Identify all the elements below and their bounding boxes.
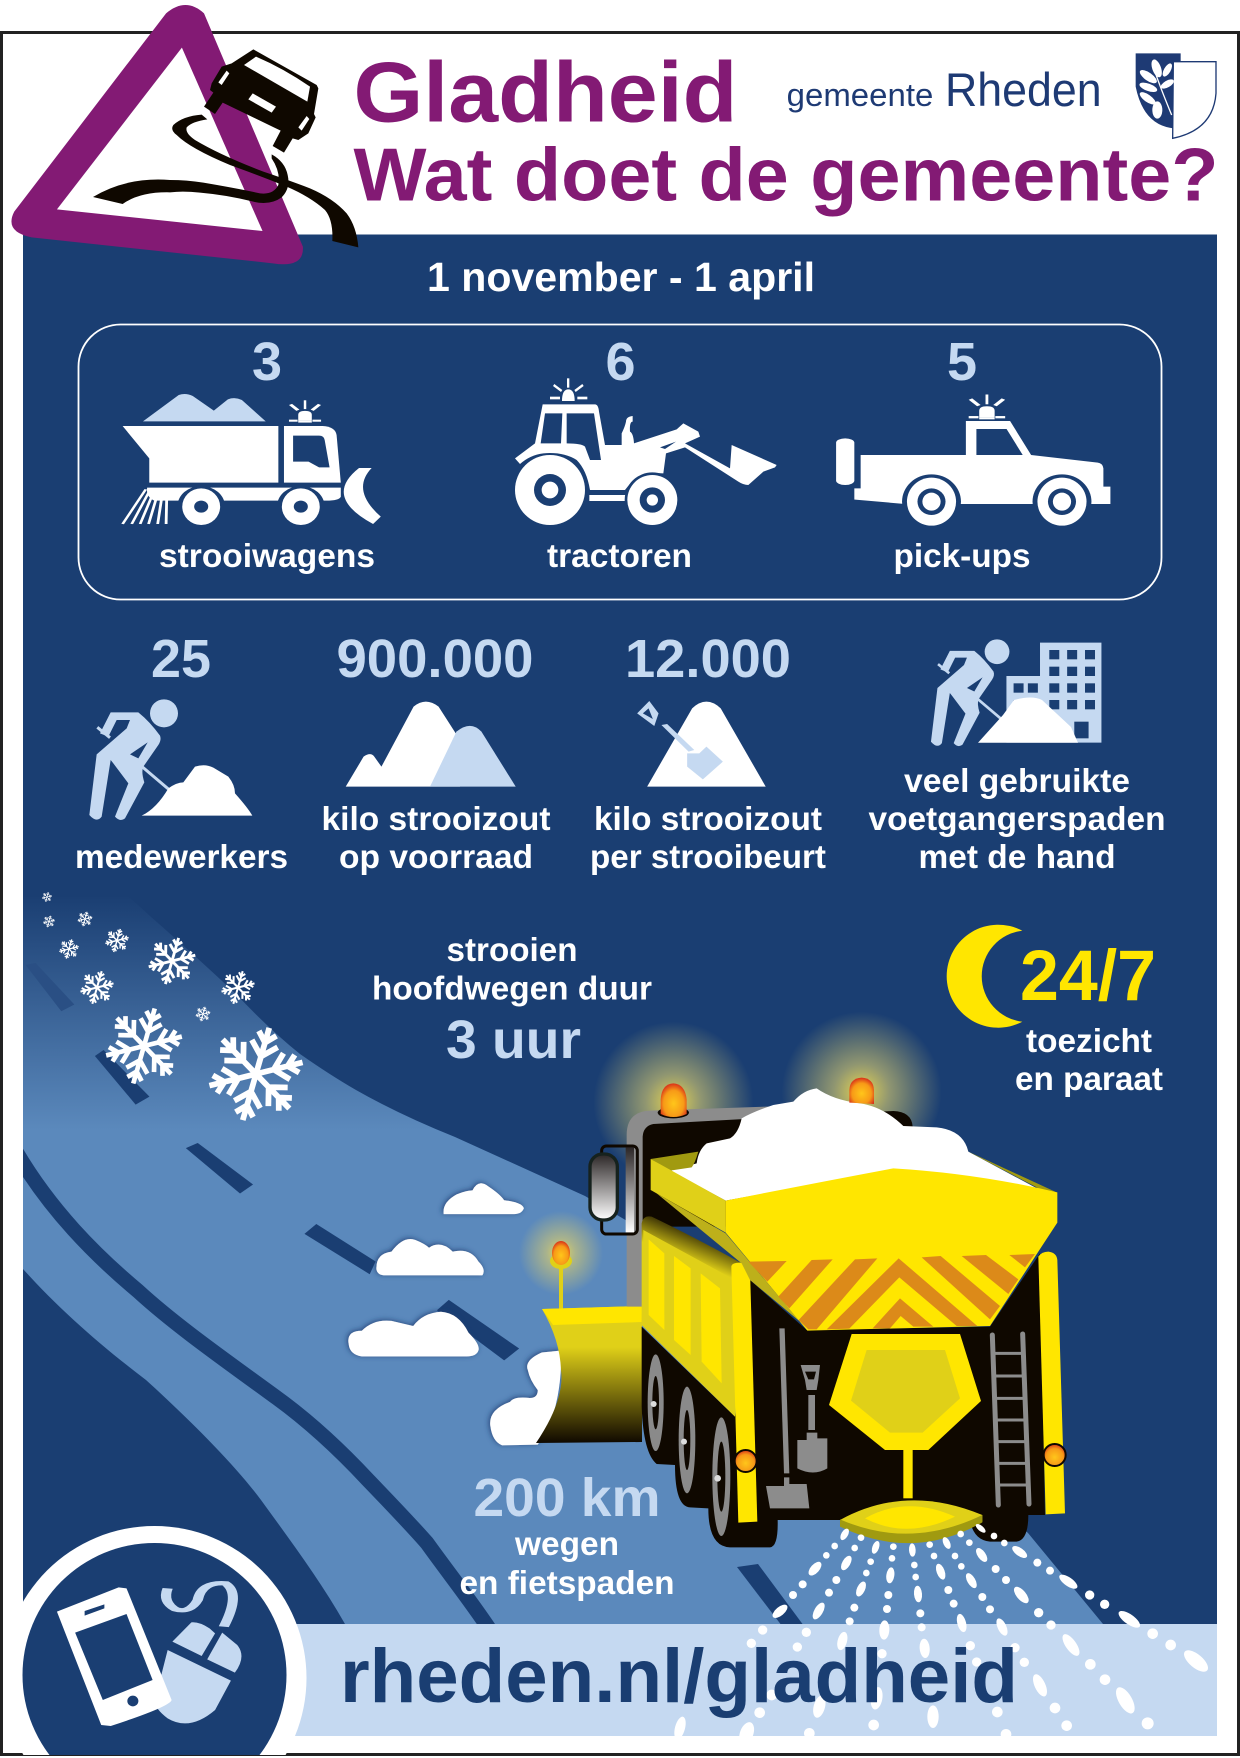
lower chassis <box>642 1253 1045 1547</box>
text: road length <box>460 1468 674 1601</box>
stat numbers: 900.000 <box>336 629 534 689</box>
website band <box>200 1624 1217 1736</box>
stat labels: voetgangerspaden <box>868 800 1166 837</box>
snowflakes <box>41 891 316 1133</box>
snow load <box>670 1088 1040 1201</box>
text: 24/7: toezicht <box>1026 1022 1152 1059</box>
icon: car <box>204 49 318 153</box>
stat labels: kilo strooizout <box>322 800 550 837</box>
snow plough <box>519 1211 642 1443</box>
logo: gemeente Rheden <box>787 53 1216 138</box>
vehicle numbers: 6 <box>605 332 636 392</box>
text: gritting duration: 3 uur <box>446 1010 581 1070</box>
icon: salt mountains <box>346 702 516 787</box>
gritting truck <box>590 1012 1066 1547</box>
road scene <box>15 870 1103 1630</box>
salt clouds on the road <box>348 1183 561 1445</box>
mirror <box>590 1146 637 1234</box>
stat labels: kilo strooizout <box>594 800 822 837</box>
tools <box>766 1328 827 1508</box>
stat labels: veel gebruikte <box>904 762 1130 799</box>
tail lights <box>735 1444 1066 1472</box>
vehicle numbers: 3 <box>252 332 282 392</box>
rear posts <box>731 1252 1065 1523</box>
title: Wat doet de gemeente? <box>354 132 1218 216</box>
icon: tractor <box>515 378 777 528</box>
stat numbers: 12.000 <box>625 629 791 689</box>
vehicle numbers <box>252 332 977 392</box>
stat labels <box>75 762 1166 875</box>
title: Gladheid <box>354 46 738 140</box>
skid marks <box>93 115 358 247</box>
spreader <box>829 1334 982 1543</box>
salt spray <box>672 1522 1212 1747</box>
beacon glows <box>593 1012 942 1182</box>
website url: rheden.nl/gladheid <box>340 1634 1018 1719</box>
text: gritting duration: hoofdwegen duur <box>372 970 652 1006</box>
text: 24/7: 24/7 <box>1020 937 1156 1016</box>
stat numbers <box>151 629 791 689</box>
hopper <box>651 1152 1057 1331</box>
text: gritting duration: strooien <box>446 931 578 968</box>
wheels <box>648 1354 730 1536</box>
ladder <box>992 1334 1029 1505</box>
text: 24/7 <box>1015 937 1163 1097</box>
text: 24/7: en paraat <box>1015 1060 1163 1097</box>
text: gritting duration <box>372 931 652 1070</box>
vehicle labels: strooiwagens <box>159 537 375 574</box>
vehicle labels: tractoren <box>547 537 692 574</box>
stat labels: medewerkers <box>75 838 288 875</box>
icon: phone <box>57 1587 172 1726</box>
text: road length: 200 km <box>474 1468 660 1528</box>
vehicle labels <box>159 537 1030 574</box>
stat numbers: 25 <box>151 629 211 689</box>
date heading: 1 november - 1 april <box>427 254 815 300</box>
icon: moon <box>947 925 1022 1028</box>
icon: worker with salt pile <box>89 699 252 820</box>
text: road length: wegen <box>514 1525 619 1562</box>
stat labels: per strooibeurt <box>590 838 826 875</box>
circle badge with phone and mouse <box>2 1526 306 1758</box>
logo: gemeente Rheden: Rheden <box>945 63 1102 116</box>
warning triangle with skidding car <box>11 5 358 264</box>
cab <box>627 1103 970 1307</box>
stat labels: op voorraad <box>339 838 533 875</box>
icon: pick-up <box>836 394 1110 529</box>
icon: gritting truck <box>123 394 381 527</box>
vehicle labels: pick-ups <box>894 537 1030 574</box>
icon: worker with building <box>931 639 1101 746</box>
title <box>354 46 1218 216</box>
beacons <box>658 1078 874 1118</box>
icon: salt pile with shovel <box>637 701 766 787</box>
icon: mouse <box>57 1583 241 1726</box>
panel: vehicles <box>78 324 1162 600</box>
icon: shield <box>1136 53 1216 138</box>
stat labels: met de hand <box>918 838 1116 875</box>
logo: gemeente Rheden: gemeente <box>787 77 933 113</box>
side panel <box>642 1216 742 1417</box>
vehicle numbers: 5 <box>947 332 977 392</box>
text: road length: en fietspaden <box>460 1564 674 1601</box>
